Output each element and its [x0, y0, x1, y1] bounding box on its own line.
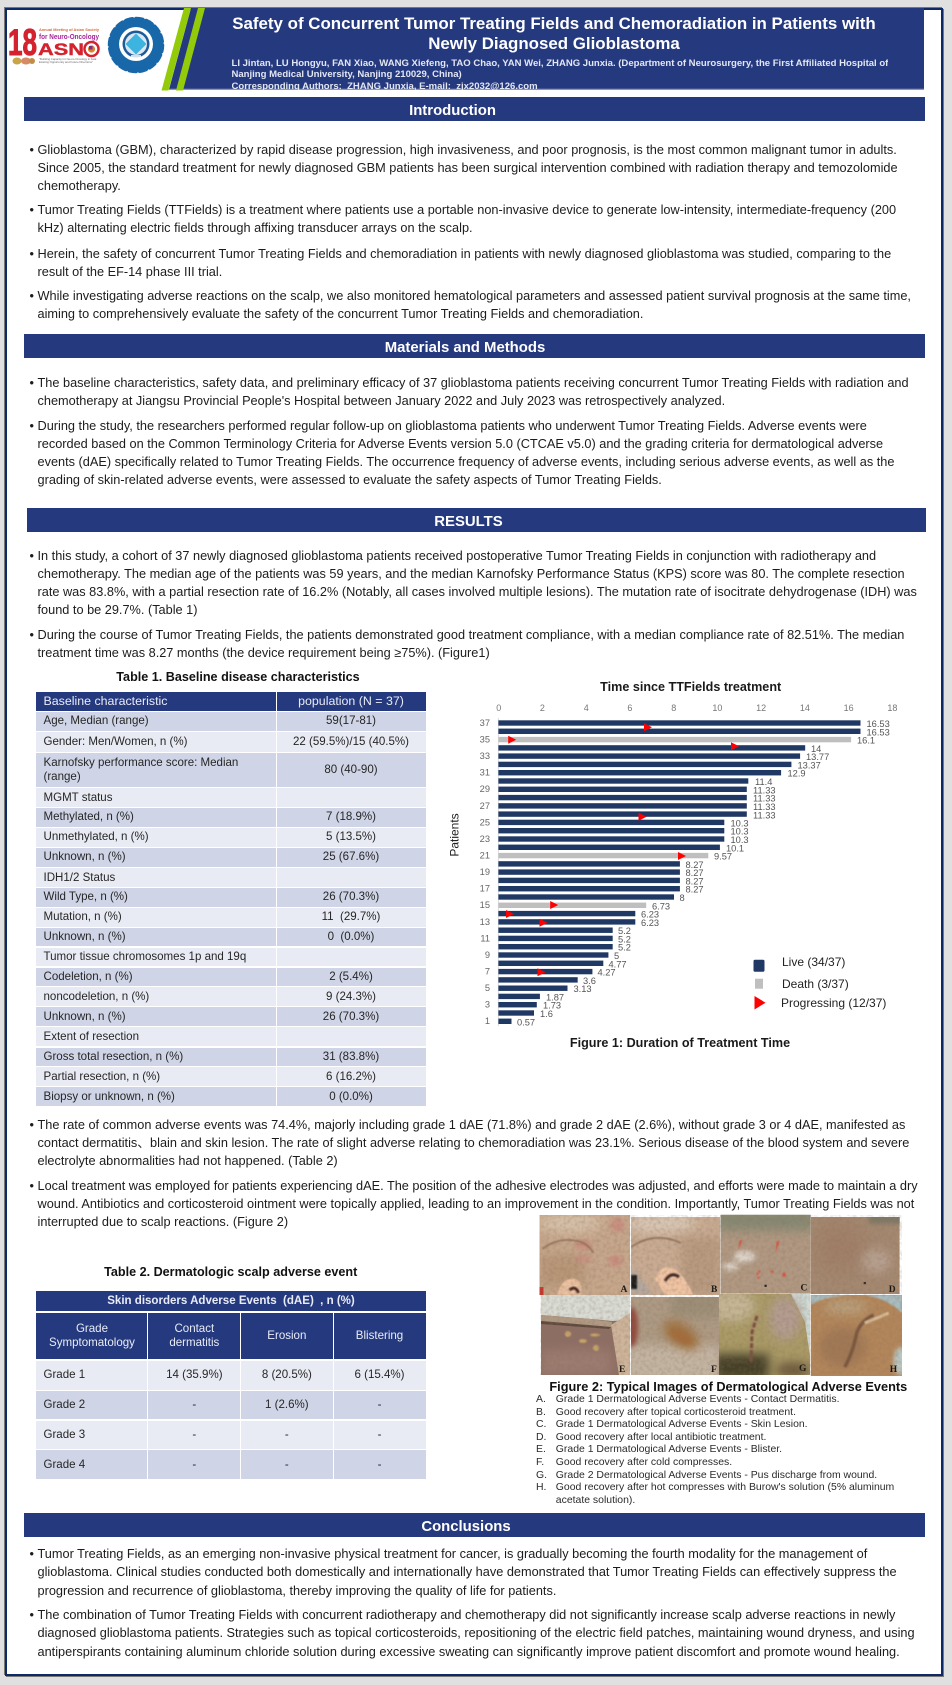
- figure 2 legend list: Grade 1 Dermatological Adverse Events - Contact Dermatitis.: [556, 1394, 839, 1405]
- x axis labels: 18: [887, 703, 897, 713]
- table 2: dermatologic adverse events: -: [285, 1459, 289, 1471]
- title: Safety of Concurrent Tumor Treating Fields and Chemoradiation in Patients with: [232, 14, 876, 33]
- heading: Materials and Methods: Materials and Methods: [385, 340, 545, 356]
- table 2: dermatologic adverse events: -: [192, 1399, 196, 1411]
- table 2: dermatologic adverse events: -: [285, 1429, 289, 1441]
- figure 2 legend list: Good recovery after local antibiotic treatment.: [556, 1432, 766, 1443]
- logo: 18th ASNO: Annual Meeting of Asian Society: [39, 28, 100, 32]
- text block: results after table: The rate of common adverse events was 74.4%, majorly including grade 1 dAE (71.8%) and grade 2 dAE (2.6%), without grade 3 or 4 dAE, manifested as: [38, 1116, 905, 1132]
- text block: results intro: [30, 548, 917, 660]
- grade rows: 14 (35.9%): [166, 1369, 223, 1381]
- logo: hospital seal: [108, 16, 164, 74]
- title: [232, 14, 876, 53]
- figure 2 legend list: C.: [536, 1419, 546, 1430]
- y axis labels: 5: [485, 983, 490, 993]
- value labels: 0.57: [517, 1017, 535, 1027]
- column headers: Contact: [174, 1323, 214, 1335]
- table 2: dermatologic adverse events: -: [378, 1459, 381, 1471]
- table 1: baseline characteristics: Mutation, n (%): [44, 911, 122, 923]
- y axis labels: 1: [485, 1016, 490, 1026]
- table 2: dermatologic adverse events: [36, 1291, 426, 1479]
- table 2: dermatologic adverse events: -: [378, 1399, 381, 1411]
- photo B: recovery after corticosteroid: B: [711, 1285, 718, 1295]
- text block: conclusions: antiperspirants containing aluminum chloride solution during excessive sweating can significantly improve patient discomfort and promote wound healing.: [38, 1644, 900, 1659]
- table 1: baseline characteristics: 26 (70.3%): [323, 1011, 379, 1023]
- photo B: recovery after corticosteroid: [631, 1217, 720, 1295]
- y axis labels: 19: [480, 867, 490, 877]
- grade rows: 8 (20.5%): [262, 1369, 312, 1381]
- table 1: baseline characteristics: Age, Median (range): [44, 715, 149, 727]
- grade rows: [36, 1361, 426, 1390]
- text block: introduction: •: [30, 288, 34, 303]
- text block: results after table: •: [30, 1178, 34, 1192]
- figure 2 legend list: B.: [536, 1407, 546, 1418]
- table 1: baseline characteristics: Unmethylated, n (%): [44, 831, 149, 843]
- text block: materials and methods: [30, 375, 909, 487]
- text block: results after table: wound. Antibiotics and corticosteroid ointment were topically applied, leading to an improvement in the condition. Importantly, Tumor Treating Fields was not: [38, 1196, 914, 1211]
- table 1: baseline characteristics: MGMT status: [44, 792, 112, 804]
- value labels: 9.57: [714, 852, 732, 862]
- figure 2 legend list: Good recovery after topical corticosteroid treatment.: [556, 1407, 796, 1418]
- value labels: 5.2: [618, 934, 631, 944]
- chart title: Time since TTFields treatment: [600, 680, 782, 694]
- y axis title: Patients: [448, 813, 462, 857]
- value labels: 5: [614, 951, 619, 961]
- heading: Introduction: [24, 97, 924, 121]
- column headers: Symptomatology: [49, 1337, 135, 1349]
- table 1: baseline characteristics: 7 (18.9%): [326, 811, 376, 823]
- table 2: dermatologic adverse events: Grade 3: [44, 1429, 85, 1441]
- column headers: Erosion: [267, 1330, 306, 1342]
- text block: results after table: •: [30, 1116, 34, 1132]
- value labels: 1.87: [546, 992, 564, 1002]
- value labels: 16.53: [866, 727, 890, 737]
- table 1: baseline characteristics: IDH1/2 Status: [44, 872, 115, 884]
- y axis labels: 15: [480, 900, 490, 910]
- column headers: dermatitis: [169, 1337, 219, 1349]
- table 1: baseline characteristics: Codeletion, n (%): [44, 971, 133, 983]
- value labels: 3.6: [583, 976, 596, 986]
- x axis labels: 4: [584, 703, 589, 713]
- value labels: 8.27: [686, 860, 704, 870]
- table 1: baseline characteristics: Extent of resection: [44, 1031, 139, 1043]
- table 1: baseline characteristics: 9 (24.3%): [326, 991, 376, 1003]
- photo F: recovery after cold compress: F: [711, 1365, 717, 1375]
- column headers: Grade: [76, 1323, 108, 1335]
- heading: Materials and Methods: [24, 334, 924, 358]
- text block: introduction: Glioblastoma (GBM), characterized by rapid disease progression, high invasiveness, and poor prognosis, is the most common malignant tumor in adults.: [38, 142, 897, 156]
- text block: conclusions: Tumor Treating Fields, as an emerging non-invasive physical treatment for cancer, is gradually becoming the fourth modality for the management of: [38, 1546, 867, 1561]
- table 2: dermatologic adverse events: Grade 4: [44, 1459, 85, 1471]
- table 2: dermatologic adverse events: -: [378, 1429, 381, 1441]
- logo: 18th ASNO: Existing Opportunity and Future Directions": [39, 61, 93, 64]
- figure 2 legend list: G.: [536, 1470, 547, 1481]
- table 1: baseline characteristics: Wild Type, n (%): [44, 891, 128, 903]
- text block: results after table: [30, 1116, 918, 1229]
- table 1: baseline characteristics: Biopsy or unknown, n (%): [44, 1091, 175, 1103]
- y axis labels: 17: [480, 884, 490, 894]
- figure 2 caption: Figure 2: Typical Images of Dermatological Adverse Events: [549, 1379, 907, 1394]
- y axis labels: 3: [485, 1000, 490, 1010]
- value labels: 12.9: [788, 769, 806, 779]
- text block: materials and methods: recorded based on the Common Terminology Criteria for Adverse Events version 5.0 (CTCAE v5.0) and the grading criteria for dermatological adverse: [38, 436, 883, 451]
- text block: results intro: found to be 29.7%. (Table 1): [38, 602, 198, 617]
- x axis labels: 12: [756, 703, 766, 713]
- x axis labels: 6: [627, 703, 632, 713]
- y axis labels: 11: [480, 933, 490, 943]
- table 1: baseline characteristics: 2 (5.4%): [329, 971, 373, 983]
- heading: Introduction: Introduction: [409, 102, 496, 118]
- y axis labels: 33: [480, 751, 490, 761]
- table 1: baseline characteristics: 59(17-81): [326, 715, 376, 727]
- value labels: 11.33: [753, 794, 776, 804]
- value labels: 16.1: [857, 736, 875, 746]
- grade rows: 6 (15.4%): [354, 1369, 404, 1381]
- photo C: skin lesion: C: [800, 1284, 808, 1294]
- table 1: baseline characteristics: 26 (70.3%): [323, 891, 379, 903]
- value labels: 8: [680, 893, 685, 903]
- heading: Conclusions: [24, 1513, 924, 1537]
- figure 2 legend list: F.: [536, 1457, 544, 1468]
- figure 2 legend list: acetate solution).: [556, 1495, 635, 1506]
- text block: introduction: Herein, the safety of concurrent Tumor Treating Fields and chemoradiation in patients with newly diagnosed glioblastoma was studied, comparing to the: [38, 246, 891, 261]
- photo G: pus discharge: G: [799, 1364, 807, 1374]
- text block: results after table: Local treatment was employed for patients experiencing dAE. The position of the adhesive electrodes was adjusted, and efforts were made to maintain a dry: [38, 1178, 918, 1192]
- text block: materials and methods: During the study, the researchers performed regular follow-up on glioblastoma patients who underwent Tumor Treating Fields. Adverse events were: [38, 418, 867, 432]
- table 2: dermatologic adverse events: -: [192, 1429, 196, 1441]
- value labels: 11.33: [753, 802, 776, 812]
- y axis line: [497, 718, 499, 1026]
- table 1: baseline characteristics: Tumor tissue chromosomes 1p and 19q: [44, 951, 246, 963]
- y axis labels: 25: [480, 817, 490, 827]
- value labels: 1.6: [540, 1009, 553, 1019]
- text block: materials and methods: events (dAE) specifically related to Tumor Treating Fields. The occurrence frequency of adverse events, including serious adverse events, as well as the: [38, 454, 894, 469]
- text block: conclusions: [30, 1546, 915, 1659]
- authors and affiliation: Nanjing Medical University, Nanjing 210029, China): [232, 68, 462, 80]
- figure 2 legend list: E.: [536, 1444, 546, 1455]
- value labels: 5.2: [618, 943, 631, 953]
- value labels: 8.27: [686, 868, 704, 878]
- value labels: 6.23: [641, 910, 659, 920]
- table 2 heading: Table 2. Dermatologic scalp adverse event: [104, 1264, 357, 1278]
- value labels: 11.33: [753, 811, 776, 821]
- figure 2: photo grid of scalp reactions: [540, 1214, 902, 1376]
- column headers: Blistering: [356, 1330, 403, 1342]
- photo E: blister: [541, 1295, 630, 1375]
- text block: materials and methods: •: [30, 418, 34, 432]
- text block: introduction: While investigating adverse reactions on the scalp, we also monitored hematological parameters and assessed patient survival prognosis at the same time,: [38, 288, 911, 303]
- figure 2 legend list: H.: [536, 1482, 546, 1493]
- value labels: 1.73: [543, 1001, 561, 1011]
- text block: results intro: •: [30, 627, 34, 642]
- figure 2 legend list: Good recovery after hot compresses with Burow's solution (5% aluminum: [556, 1482, 894, 1493]
- y axis labels: 31: [480, 768, 490, 778]
- value labels: 4.77: [608, 959, 627, 969]
- grade rows: Grade 1: [44, 1369, 85, 1381]
- x axis labels: 10: [712, 703, 722, 713]
- photo D: recovery after antibiotic: D: [889, 1285, 896, 1295]
- y axis labels: 21: [480, 850, 490, 860]
- heading: RESULTS: RESULTS: [434, 514, 503, 530]
- photo H: recovery after hot compress: [810, 1295, 902, 1376]
- photo D: recovery after antibiotic: [810, 1217, 900, 1295]
- value labels: 10.1: [726, 843, 744, 853]
- text block: conclusions: diagnosed glioblastoma patients. Strategies such as topical corticosteroids, repositioning of the electric field patches, maintaining wound dryness, and using: [38, 1625, 915, 1640]
- text block: introduction: Since 2005, the standard treatment for newly diagnosed GBM patients has been surgical intervention combined with radiation therapy and temozolomide: [38, 160, 898, 175]
- value labels: 10.3: [730, 827, 749, 837]
- y axis labels: 23: [480, 834, 490, 844]
- table 1: baseline characteristics: 5 (13.5%): [326, 831, 376, 843]
- value labels: 10.3: [730, 835, 749, 845]
- live bars: [499, 721, 860, 1024]
- banner shapes with green stripes: [162, 8, 924, 90]
- y axis labels: 27: [480, 801, 490, 811]
- text block: materials and methods: grading of skin-related adverse events, were assessed to evaluate the safety aspects of Tumor Treating Fields.: [38, 472, 662, 487]
- value labels: 8.27: [686, 876, 704, 886]
- figure 2 legend list: [536, 1394, 894, 1506]
- value labels: 6.73: [652, 901, 670, 911]
- text block: introduction: •: [30, 142, 34, 156]
- title: Newly Diagnosed Glioblastoma: [428, 34, 680, 53]
- legend: Progressing (12/37): [781, 996, 886, 1010]
- death bars: [499, 737, 851, 908]
- y axis labels: 29: [480, 784, 490, 794]
- progression markers: [506, 723, 739, 976]
- text block: conclusions: progression and recurrence of glioblastoma, thereby improving the quality of life for patients.: [38, 1583, 556, 1598]
- y axis labels: 35: [480, 734, 490, 744]
- table 1: baseline characteristics: 11 (29.7%): [322, 911, 380, 923]
- table 1: baseline characteristics: Karnofsky performance score: Median: [44, 757, 238, 769]
- figure 2 legend list: Grade 1 Dermatological Adverse Events - Blister.: [556, 1444, 782, 1455]
- text block: results after table: contact dermatitis、blain and skin lesion. The rate of slight adverse relating to chemoradiation was 23.1%. Serious disease of the blood system and severe: [38, 1135, 909, 1150]
- table 1: baseline characteristics: Methylated, n (%): [44, 811, 134, 823]
- text block: introduction: chemotherapy.: [38, 178, 121, 193]
- text block: results intro: In this study, a cohort of 37 newly diagnosed glioblastoma patients received postoperative Tumor Treating Fields in conjunction with radiotherapy and: [38, 548, 876, 562]
- table 1: baseline characteristics: 31 (83.8%): [323, 1051, 379, 1063]
- table 1: baseline characteristics: 6 (16.2%): [326, 1071, 376, 1083]
- text block: conclusions: •: [30, 1546, 34, 1561]
- table 1: baseline characteristics: Unknown, n (%): [44, 1011, 126, 1023]
- x axis labels: [496, 703, 897, 713]
- table 1: baseline characteristics: Unknown, n (%): [44, 851, 126, 863]
- photo F: recovery after cold compress: [631, 1297, 719, 1375]
- text block: introduction: •: [30, 202, 34, 217]
- table 1: baseline characteristics: Gross total resection, n (%): [44, 1051, 183, 1063]
- legend: Live (34/37): [782, 955, 845, 969]
- value labels: 13.37: [798, 760, 821, 770]
- text block: introduction: •: [30, 246, 34, 261]
- merged header: [36, 1291, 426, 1311]
- merged header: Skin disorders Adverse Events (dAE) , n (%): [107, 1295, 355, 1307]
- value labels: 4.27: [598, 968, 616, 978]
- authors and affiliation: [232, 58, 888, 90]
- table 1 heading: Table 1. Baseline disease characteristics: [116, 670, 360, 684]
- value labels: 14: [811, 744, 821, 754]
- value labels: 11.4: [755, 777, 772, 787]
- legend: [754, 955, 886, 1010]
- figure 2 legend list: Grade 2 Dermatological Adverse Events - Pus discharge from wound.: [556, 1470, 877, 1481]
- table 1: baseline characteristics: (range): [44, 771, 81, 783]
- column headers: [36, 1313, 426, 1359]
- photo G: pus discharge: [719, 1294, 810, 1375]
- x axis labels: 16: [844, 703, 854, 713]
- heading: RESULTS: [27, 508, 926, 532]
- table 1: baseline characteristics: [36, 692, 426, 1106]
- header row: population (N = 37): [298, 694, 404, 708]
- value labels: 16.53: [866, 719, 890, 729]
- value labels: [517, 719, 890, 1027]
- text block: results intro: •: [30, 548, 34, 562]
- text block: results intro: During the course of Tumor Treating Fields, the patients demonstrated good treatment compliance, with a median compliance rate of 82.51%. The median: [38, 627, 904, 642]
- figure 2 legend list: Grade 1 Dermatological Adverse Events - Skin Lesion.: [556, 1419, 808, 1430]
- text block: introduction: [30, 142, 911, 321]
- heading: Conclusions: Conclusions: [421, 1518, 511, 1534]
- x axis labels: 14: [800, 703, 810, 713]
- y axis labels: [480, 718, 490, 1026]
- text block: conclusions: •: [30, 1607, 34, 1622]
- table 1: baseline characteristics: Unknown, n (%): [44, 931, 126, 943]
- table 1: baseline characteristics: Partial resection, n (%): [44, 1071, 160, 1083]
- logo: 18th ASNO: "Building Capacity for Neuro-Oncology in Asia:: [39, 58, 97, 61]
- skin grain overlay: [540, 1215, 902, 1375]
- logo: 18th ASNO: [8, 26, 100, 64]
- value labels: 11.33: [753, 785, 776, 795]
- photo A: contact dermatitis: A: [620, 1285, 628, 1295]
- header row: Baseline characteristic: [44, 694, 167, 708]
- table 1: baseline characteristics: 22 (59.5%)/15 (40.5%): [293, 736, 409, 748]
- table 2: dermatologic adverse events: Grade 2: [44, 1399, 85, 1411]
- table 1: baseline characteristics: 0 (0.0%): [328, 931, 374, 943]
- text block: introduction: aiming to comprehensively evaluate the safety of the concurrent Tumor Treating Fields and chemoradiation.: [38, 306, 643, 321]
- y axis labels: 9: [485, 950, 490, 960]
- value labels: 10.3: [730, 818, 749, 828]
- table 2: dermatologic adverse events: -: [192, 1459, 196, 1471]
- figure 2 legend list: A.: [536, 1394, 546, 1405]
- authors and affiliation: LI Jintan, LU Hongyu, FAN Xiao, WANG Xiefeng, TAO Chao, YAN Wei, ZHANG Junxia. (Department of Neurosurgery, the First Affiliated Hospital of: [232, 58, 888, 68]
- figure 1: swimmer bar chart: [448, 680, 897, 1050]
- photo C: skin lesion: [720, 1214, 811, 1294]
- y axis labels: 13: [480, 917, 490, 927]
- table 1: baseline characteristics: Gender: Men/Women, n (%): [44, 736, 187, 748]
- table 1: baseline characteristics: 80 (40-90): [324, 764, 378, 776]
- figure 2 legend list: D.: [536, 1432, 546, 1443]
- header row: [36, 692, 426, 710]
- x axis labels: 8: [671, 703, 676, 713]
- text block: introduction: result of the EF-14 phase III trial.: [38, 264, 222, 279]
- value labels: 13.77: [806, 752, 829, 762]
- text block: results intro: rate was 83.8%, with a partial resection rate of 16.2% (Notably, all cases involved multiple lesions). The mutation rate of isocitrate dehydrogenase (IDH) was: [38, 584, 917, 599]
- value labels: 6.23: [641, 918, 659, 928]
- text block: results after table: electrolyte abnormalities had not happened. (Table 2): [38, 1153, 338, 1168]
- text block: conclusions: glioblastoma. Clinical studies conducted both domestically and internationally have demonstrated that Tumor Treating Fields can effectively suppress the: [38, 1564, 897, 1579]
- text block: introduction: kHz) alternating electric fields through affixing transducer arrays on the scalp.: [38, 220, 473, 235]
- legend: Death (3/37): [782, 977, 849, 991]
- value labels: 8.27: [686, 885, 704, 895]
- text block: materials and methods: chemotherapy at Jiangsu Provincial People's Hospital between January 2022 and July 2023 was retrospectively analyzed.: [38, 393, 725, 408]
- y axis labels: 7: [485, 966, 490, 976]
- x axis labels: 2: [540, 703, 545, 713]
- table 2: dermatologic adverse events: 1 (2.6%): [265, 1399, 309, 1411]
- photo E: blister: E: [619, 1365, 625, 1375]
- value labels: 5.2: [618, 926, 631, 936]
- table 1: baseline characteristics: 25 (67.6%): [323, 851, 379, 863]
- text block: results intro: treatment time was 8.27 months (the device requirement being ≥75%). (Figure1): [38, 645, 490, 660]
- text block: materials and methods: •: [30, 375, 34, 390]
- x axis labels: 0: [496, 703, 501, 713]
- photo H: recovery after hot compress: H: [890, 1365, 898, 1375]
- value labels: 3.13: [574, 984, 592, 994]
- text block: materials and methods: The baseline characteristics, safety data, and preliminary efficacy of 37 glioblastoma patients receiving concurrent Tumor Treating Fields with radiation and: [38, 375, 909, 390]
- logo: 18th ASNO: ASN: [38, 41, 84, 59]
- text block: introduction: Tumor Treating Fields (TTFields) is a treatment where patients use a portable non-invasive device to generate low-intensity, intermediate-frequency (200: [38, 202, 896, 217]
- table 1: baseline characteristics: 0 (0.0%): [329, 1091, 373, 1103]
- text block: results after table: interrupted due to scalp reactions. (Figure 2): [38, 1214, 288, 1229]
- figure 2 legend list: Good recovery after cold compresses.: [556, 1457, 732, 1468]
- photo A: contact dermatitis: [540, 1215, 630, 1295]
- table 1: baseline characteristics: noncodeletion, n (%): [44, 991, 149, 1003]
- text block: conclusions: The combination of Tumor Treating Fields with concurrent radiotherapy and chemotherapy did not significantly increase scalp adverse reactions in newly: [38, 1607, 895, 1622]
- header banner: [8, 8, 924, 90]
- figure 1 caption: Figure 1: Duration of Treatment Time: [570, 1036, 790, 1050]
- text block: results intro: chemotherapy. The median age of the patients was 59 years, and the median Karnofsky Performance Status (KPS) score was 80. The complete resection: [38, 566, 905, 581]
- y axis labels: 37: [480, 718, 490, 728]
